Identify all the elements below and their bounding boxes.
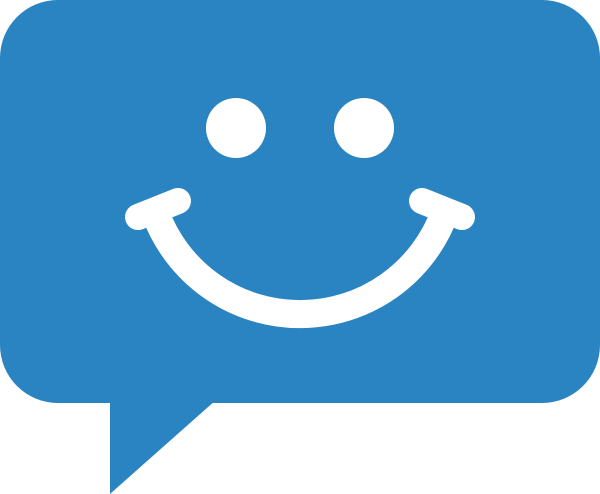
smile [138, 201, 462, 314]
eyes [206, 98, 394, 158]
